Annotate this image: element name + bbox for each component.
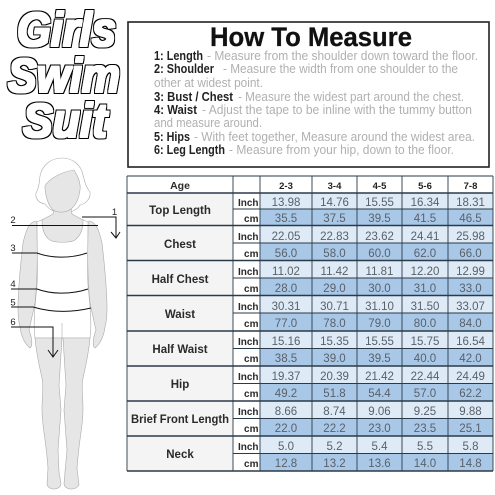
row: chest: 62.0 (414, 248, 436, 260)
row: neck (166, 441, 482, 470)
row: brief front length: 8.66 (275, 406, 297, 418)
row: waist: 80.0 (414, 318, 436, 330)
instruction lines: - Measure from your hip, down to the floor. (229, 143, 454, 157)
row: half waist: 15.55 (365, 336, 394, 348)
row: brief front length (131, 406, 482, 435)
header row: 4-5 (373, 181, 387, 192)
row: top length (149, 197, 485, 225)
instruction lines: 3: Bust / Chest (154, 90, 234, 104)
measurement numbers: 4 (10, 279, 16, 290)
face (45, 170, 80, 212)
title: Girls Swim Suit: Suit (23, 95, 109, 148)
header row: 3-4 (328, 181, 342, 192)
instruction lines: 1: Length (154, 49, 203, 63)
row: top length: 15.55 (365, 197, 394, 209)
figure: child body outline (18, 158, 107, 489)
header row: 7-8 (464, 181, 477, 192)
row: hip (171, 371, 485, 400)
row: half waist: 15.75 (411, 336, 439, 348)
measurement lines (11, 217, 120, 357)
row: hip: cm (244, 389, 259, 400)
row: half waist: 16.54 (456, 336, 485, 348)
header row (170, 180, 477, 192)
row: hip: 57.0 (414, 388, 436, 400)
instruction lines (154, 49, 478, 157)
row: hip: 20.39 (320, 371, 349, 383)
instruction lines: and measure around. (154, 116, 262, 130)
header row: Age (170, 180, 190, 192)
row: hip: 19.37 (272, 371, 300, 383)
row: chest (164, 231, 485, 260)
row: chest: 56.0 (275, 248, 297, 260)
row: neck: 14.0 (414, 458, 436, 470)
3 chest line (12, 253, 87, 257)
row: top length: 35.5 (275, 213, 297, 225)
row: top length: 18.31 (456, 197, 485, 209)
row: chest: Inch (238, 232, 258, 243)
row: waist: 78.0 (323, 318, 346, 330)
row: waist (165, 301, 485, 330)
row: top length: 37.5 (323, 213, 346, 225)
row: half waist (152, 336, 485, 365)
instruction lines: other at widest point. (154, 76, 263, 90)
row: waist: 30.71 (320, 301, 349, 313)
row: half chest: 12.99 (456, 266, 485, 278)
neck and chest (42, 208, 83, 242)
measurement numbers: 3 (10, 243, 16, 254)
size chart table (127, 176, 493, 471)
header row: 2-3 (279, 181, 293, 192)
row: half chest: 11.81 (366, 266, 393, 278)
row: half chest: 11.02 (272, 266, 300, 278)
row: half chest: cm (244, 284, 259, 295)
heading: how to measure: How To Measure (210, 22, 412, 52)
row: neck: cm (244, 459, 259, 470)
row: hip: Hip (171, 379, 189, 391)
row: chest: 25.98 (456, 231, 485, 243)
instruction lines: - Measure the width from one shoulder to the (223, 62, 458, 76)
panel: how to measure (128, 22, 489, 167)
row: neck: 5.0 (278, 441, 294, 453)
4 waist line (11, 289, 88, 293)
row: half waist: 40.0 (414, 353, 436, 365)
row: half chest: 12.20 (411, 266, 439, 278)
instruction lines: 2: Shoulder (154, 62, 214, 76)
instruction lines: - Measure from the shoulder down toward the floor. (207, 49, 478, 63)
measurement numbers: 2 (10, 215, 16, 226)
row: brief front length: cm (244, 424, 259, 435)
measurement numbers: 1 (112, 207, 117, 218)
row: neck: 5.4 (372, 441, 388, 453)
row: half waist: 42.0 (459, 353, 482, 365)
row: neck: 5.8 (462, 441, 478, 453)
row: waist: 33.07 (456, 301, 485, 313)
row: brief front length: Brief Front Length (131, 414, 229, 426)
shorts centre seam (61, 323, 63, 339)
row: brief front length: 25.1 (459, 423, 482, 435)
row: half chest: 31.0 (414, 283, 436, 295)
row: waist: Waist (165, 309, 195, 321)
arms and hands (18, 221, 37, 348)
row: half chest: 29.0 (323, 283, 346, 295)
instruction lines: - Measure the widest part around the chest. (238, 90, 464, 104)
row: chest: 23.62 (365, 231, 394, 243)
row: top length: Inch (238, 198, 258, 209)
row: half chest: 33.0 (459, 283, 482, 295)
row: half chest (152, 266, 485, 295)
row: chest: 22.05 (272, 231, 300, 243)
row: top length: cm (244, 214, 259, 225)
row: top length: 16.34 (411, 197, 440, 209)
row: hip: 54.4 (368, 388, 391, 400)
row: neck: 5.2 (326, 441, 342, 453)
6 leg length arrow (11, 327, 58, 357)
row: half chest: 30.0 (368, 283, 391, 295)
row: half waist: Half Waist (152, 344, 208, 356)
row: waist: 31.50 (411, 301, 439, 313)
title: Girls Swim Suit: Swim (8, 50, 120, 103)
row: hip: 21.42 (365, 371, 394, 383)
row: neck: Inch (238, 442, 258, 453)
row: hip: 51.8 (323, 388, 346, 400)
row: hip: 22.44 (411, 371, 440, 383)
instruction lines: 4: Waist (154, 103, 198, 117)
row: neck: 14.8 (459, 458, 482, 470)
1 length arrow (82, 217, 120, 238)
torso and shorts (34, 215, 91, 338)
table grid (127, 176, 493, 471)
instruction lines: - With feet together, Measure around the widest area. (194, 130, 475, 144)
row: half waist: 15.16 (272, 336, 300, 348)
measurement numbers: 5 (10, 298, 16, 308)
title: Girls Swim Suit (8, 4, 120, 148)
row: top length: 13.98 (272, 197, 300, 209)
row: neck: 13.2 (323, 458, 346, 470)
row: brief front length: 9.88 (459, 406, 482, 418)
table backgrounds (127, 176, 493, 471)
row: half chest: 11.42 (321, 266, 348, 278)
row: brief front length: 22.2 (323, 423, 346, 435)
row: hip: 62.2 (459, 388, 482, 400)
row: half waist: 39.0 (323, 353, 346, 365)
instruction lines: 5: Hips (154, 130, 190, 144)
row: waist: 84.0 (459, 318, 482, 330)
row: top length: 39.5 (368, 213, 391, 225)
row: waist: 30.31 (272, 301, 300, 313)
row: neck: Neck (166, 449, 194, 461)
row: brief front length: 22.0 (275, 423, 297, 435)
row: brief front length: 8.74 (323, 406, 346, 418)
measurement numbers: 6 (10, 317, 16, 328)
2 shoulder line (12, 224, 98, 226)
row: half waist: cm (244, 354, 259, 365)
row: half waist: 38.5 (275, 353, 297, 365)
instruction lines: 6: Leg Length (154, 143, 225, 157)
row: chest: 66.0 (459, 248, 482, 260)
row: brief front length: 9.06 (368, 406, 391, 418)
row: chest: 58.0 (323, 248, 346, 260)
row: chest: cm (244, 249, 259, 260)
row: half chest: 28.0 (275, 283, 297, 295)
row: hip: 49.2 (275, 388, 297, 400)
legs (35, 338, 62, 489)
row: top length: 41.5 (414, 213, 436, 225)
row: waist: 77.0 (275, 318, 297, 330)
row: half chest: Half Chest (152, 274, 209, 286)
row: brief front length: 9.25 (414, 406, 436, 418)
row: chest: 24.41 (411, 231, 439, 243)
instruction lines: - Adjust the tape to be inline with the tummy button (202, 103, 472, 117)
hair (36, 158, 90, 213)
row: neck: 13.6 (368, 458, 391, 470)
row: waist: 31.10 (365, 301, 394, 313)
row: brief front length: Inch (238, 407, 258, 418)
row: neck: 12.8 (275, 458, 297, 470)
row: half chest: Inch (238, 267, 258, 278)
row: chest: Chest (164, 239, 196, 251)
row: top length: Top Length (149, 205, 211, 217)
row: brief front length: 23.5 (414, 423, 436, 435)
row: chest: 60.0 (368, 248, 391, 260)
5 hip line (11, 307, 91, 311)
row: half waist: Inch (238, 337, 258, 348)
row: brief front length: 23.0 (368, 423, 391, 435)
row: half waist: 39.5 (368, 353, 391, 365)
row: top length: 46.5 (459, 213, 482, 225)
row: waist: cm (244, 319, 259, 330)
row: top length: 14.76 (320, 197, 349, 209)
title: Girls Swim Suit: Girls (17, 4, 116, 57)
measurement numbers (10, 207, 117, 328)
row: half waist: 15.35 (320, 336, 349, 348)
row: neck: 5.5 (417, 441, 433, 453)
header row: 5-6 (418, 181, 432, 192)
row: chest: 22.83 (320, 231, 349, 243)
row: waist: 79.0 (368, 318, 391, 330)
row: hip: Inch (238, 372, 258, 383)
row: waist: Inch (238, 302, 258, 313)
row: hip: 24.49 (456, 371, 485, 383)
